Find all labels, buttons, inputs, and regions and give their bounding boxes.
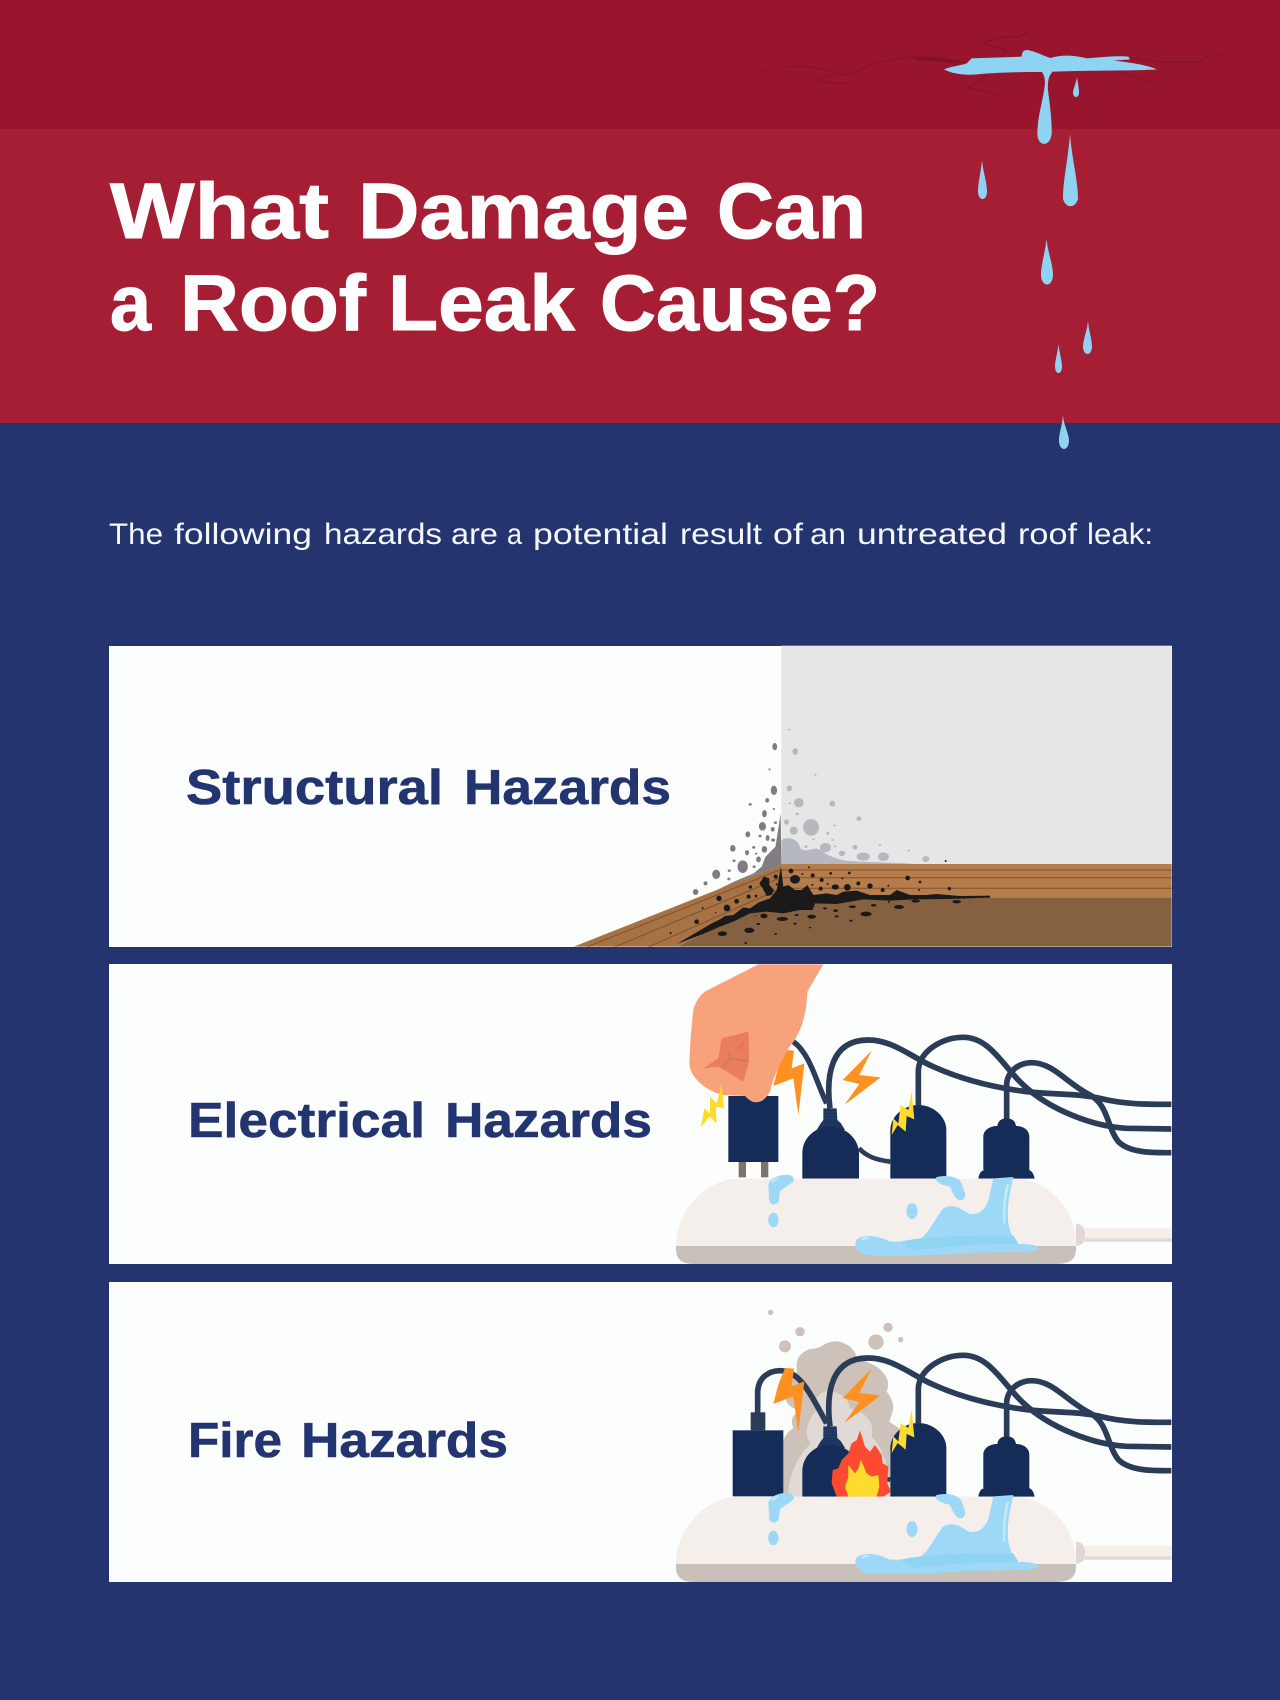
grey mold on left wall <box>693 743 781 895</box>
intro text: result <box>680 518 763 551</box>
intro text: untreated <box>857 518 1007 551</box>
intro text: an <box>810 518 846 551</box>
panel background <box>109 646 1172 947</box>
title: Roof <box>180 258 367 347</box>
smoke <box>768 1310 903 1497</box>
panel background <box>109 1282 1172 1582</box>
illustration: hand pulling plug from wet power strip <box>676 964 1172 1264</box>
title: What <box>110 166 329 255</box>
flame <box>832 1431 891 1497</box>
heading: fire hazards <box>188 1414 508 1468</box>
light mold on right wall <box>781 729 929 864</box>
intro text: hazards <box>324 518 442 551</box>
cables <box>829 1037 1171 1162</box>
heading: electrical hazards: Electrical <box>188 1094 425 1148</box>
lightning bolts <box>773 1368 914 1453</box>
icon: water puddle and drips <box>944 50 1157 144</box>
panel: electrical hazards <box>109 964 1172 1264</box>
title: Damage <box>358 166 689 255</box>
plugged-in plugs <box>802 1423 1035 1497</box>
illustration: smoke behind burning power strip <box>676 1310 1172 1582</box>
intro text: of <box>773 518 804 551</box>
header: red title band <box>0 129 1280 423</box>
panel: structural hazards <box>109 646 1172 947</box>
yellow spark on held plug <box>701 1083 724 1127</box>
intro text: potential <box>533 518 668 551</box>
water on power strip <box>768 1175 1038 1256</box>
lightning bolts <box>773 1050 914 1135</box>
held plug cable <box>793 1042 827 1103</box>
heading: fire hazards: Hazards <box>301 1414 508 1468</box>
icon: ceiling cracks <box>760 32 1227 96</box>
unplugged cable <box>758 1371 827 1423</box>
water on power strip <box>768 1493 1038 1574</box>
intro text: a <box>507 518 522 551</box>
floor <box>677 897 1172 947</box>
plugged-in plugs <box>802 1105 1035 1179</box>
intro text: following <box>174 518 312 551</box>
panel: fire hazards <box>109 1282 1172 1582</box>
right baseboard <box>781 864 1172 897</box>
panel background <box>109 964 1172 1264</box>
title <box>110 166 880 347</box>
header: dark red ceiling band <box>0 0 1280 129</box>
wall <box>781 646 1172 864</box>
held plug <box>728 1096 778 1177</box>
cables <box>829 1355 1171 1480</box>
title: Leak <box>388 258 576 347</box>
adapter plug <box>733 1412 783 1496</box>
left baseboard <box>574 865 781 947</box>
intro text: leak: <box>1087 518 1153 551</box>
intro text: are <box>451 518 498 551</box>
heading: electrical hazards: Hazards <box>445 1094 652 1148</box>
heading: structural hazards: Structural <box>186 761 443 815</box>
title: Can <box>717 166 866 255</box>
heading: structural hazards: Hazards <box>464 761 671 815</box>
heading: structural hazards <box>186 761 671 815</box>
power strip <box>676 1497 1172 1582</box>
intro text <box>109 518 1153 551</box>
hand <box>689 964 823 1102</box>
heading: electrical hazards <box>188 1094 652 1148</box>
intro text: roof <box>1018 518 1078 551</box>
illustration: moldy wall corner <box>574 646 1172 947</box>
intro text: The <box>109 518 163 551</box>
black mold along floor <box>670 860 990 944</box>
title: Cause? <box>600 258 880 347</box>
heading: fire hazards: Fire <box>188 1414 282 1468</box>
power strip <box>676 1179 1172 1264</box>
title: a <box>110 258 152 347</box>
icon: falling water drops <box>978 77 1092 449</box>
